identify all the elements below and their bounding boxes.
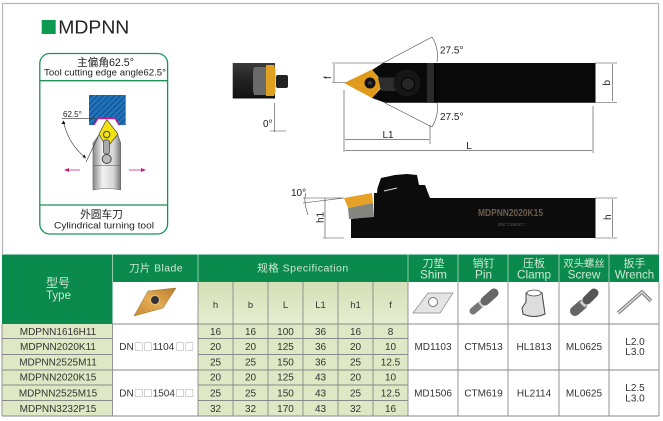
header labels: 型号 <box>46 276 70 290</box>
spec values: 25 <box>245 358 256 368</box>
dimension: 0 degrees: 0° <box>263 119 273 130</box>
spec values: 36 <box>315 342 326 353</box>
spare parts values <box>414 337 645 404</box>
icon: blade insert <box>134 288 176 316</box>
spec values: 125 <box>277 373 294 384</box>
header labels: 销钉 <box>472 256 494 270</box>
spare parts values: MD1506 <box>414 388 452 400</box>
blade codes: □□ <box>176 386 194 400</box>
spec values: 25 <box>210 388 221 400</box>
panel caption: 外圆车刀 <box>80 208 123 221</box>
end view of tool holder <box>233 63 288 98</box>
blade codes: □□ <box>134 386 153 400</box>
blade codes: 1504 <box>153 388 175 400</box>
diagram: workpiece and tool <box>62 95 146 190</box>
spec values: 20 <box>350 342 361 353</box>
type column: MDPNN2020K15 <box>20 373 97 384</box>
spec values: 10 <box>385 373 396 384</box>
spec values: 12.5 <box>381 358 401 368</box>
spec values: 20 <box>210 342 221 353</box>
table <box>2 254 659 416</box>
spare parts values: L2.0 <box>625 337 645 348</box>
side view of tool holder: DN□□1504□□ <box>498 222 526 227</box>
spec values: 25 <box>350 388 361 400</box>
header labels: 刀片 Blade <box>129 262 183 275</box>
icon: clamp <box>522 290 545 316</box>
spec header cells <box>198 282 408 324</box>
spec values: 150 <box>277 388 294 400</box>
labels: top view dimensions: L1 <box>382 130 394 141</box>
labels: side view dimensions <box>291 188 614 223</box>
panel: cutting angle diagram <box>40 54 168 234</box>
spare parts values: CTM513 <box>464 342 503 353</box>
spec values: 16 <box>350 327 361 338</box>
spec values: 32 <box>210 404 221 415</box>
spec column labels: h <box>213 300 218 311</box>
labels: top view dimensions: b <box>602 80 613 86</box>
type column: MDPNN2525M11 <box>19 358 97 368</box>
header labels: 扳手 <box>624 256 646 270</box>
labels: top view dimensions <box>323 46 613 152</box>
labels: top view dimensions: 27.5° <box>440 46 463 56</box>
header dividers <box>112 254 609 282</box>
spec values <box>210 327 401 415</box>
dimension: 0 degrees <box>263 103 286 132</box>
spec values: 125 <box>277 342 294 353</box>
labels: side view dimensions: h <box>603 214 614 220</box>
dimension: 62.5 degrees: 62.5° <box>63 110 82 119</box>
type column <box>19 327 98 415</box>
spare parts values: L3.0 <box>625 394 645 404</box>
dimension lines: side view <box>303 193 617 238</box>
header labels: Wrench <box>615 270 654 282</box>
blade codes: □□ <box>176 339 194 353</box>
spec values: 32 <box>245 404 256 415</box>
type column: MDPNN3232P15 <box>20 404 97 415</box>
spec values: 25 <box>245 388 256 400</box>
spec values: 36 <box>315 358 326 368</box>
header labels: 规格 Specification <box>257 262 349 275</box>
table header background <box>2 254 659 324</box>
spec values: 10 <box>385 342 396 353</box>
insert <box>344 70 384 98</box>
spec values: 150 <box>277 358 294 368</box>
type column: MDPNN2020K11 <box>20 342 96 353</box>
header labels <box>46 256 654 302</box>
side view of tool holder <box>344 174 596 238</box>
spec values: 20 <box>350 373 361 384</box>
spare parts values: CTM619 <box>464 388 503 400</box>
spec values: 43 <box>315 373 326 384</box>
spec values: 25 <box>350 358 361 368</box>
labels: side view dimensions: 10° <box>291 188 306 199</box>
spec values: 43 <box>315 404 326 415</box>
blade codes: □□ <box>134 339 153 353</box>
title: MDPNN: MDPNN <box>58 16 129 38</box>
spec values: 43 <box>315 388 326 400</box>
labels: top view dimensions: f <box>323 76 334 79</box>
spec values: 16 <box>385 404 396 415</box>
blade codes: DN <box>119 342 134 353</box>
labels: top view dimensions: L <box>466 141 472 152</box>
header labels: 刀垫 <box>422 256 444 270</box>
spec column labels <box>213 300 392 311</box>
spare parts values: L3.0 <box>625 347 645 358</box>
spare parts values: HL2114 <box>517 388 552 400</box>
header labels: 压板 <box>523 256 545 270</box>
arrows: feed direction <box>64 168 146 172</box>
spec values: 25 <box>210 358 221 368</box>
spare parts values: ML0625 <box>566 388 603 400</box>
type column: MDPNN1616H11 <box>20 327 97 338</box>
spare parts values: ML0625 <box>566 342 603 353</box>
dimension lines: top view <box>332 37 617 153</box>
clamp <box>378 78 396 91</box>
header labels: Shim <box>420 268 447 282</box>
blade codes: 1104 <box>153 342 175 353</box>
spec column labels: h1 <box>350 300 361 311</box>
spec values: 20 <box>210 373 221 384</box>
spec values: 16 <box>245 327 256 338</box>
blade codes: DN <box>119 388 134 400</box>
panel heading: 主偏角62.5° <box>77 55 134 69</box>
spare parts values: HL1813 <box>516 342 552 353</box>
page frame <box>2 4 658 254</box>
spec values: 36 <box>315 327 326 338</box>
spec values: 170 <box>277 404 294 415</box>
spare parts values: MD1103 <box>414 342 452 353</box>
spare parts values: L2.5 <box>625 383 645 394</box>
spec column labels: f <box>389 300 392 311</box>
spec values: 20 <box>245 342 256 353</box>
grid lines <box>2 282 659 416</box>
panel caption <box>54 208 154 230</box>
spec column labels: L1 <box>315 300 326 311</box>
spec values: 20 <box>245 373 256 384</box>
spec values: 8 <box>388 327 394 338</box>
type column: MDPNN2525M15 <box>19 388 98 400</box>
table row shading <box>2 324 408 416</box>
side view of tool holder: MDPNN2020K15 <box>478 208 543 219</box>
panel caption: Cylindrical turning tool <box>54 220 154 230</box>
header labels: Screw <box>568 268 601 282</box>
icon: pin <box>473 293 494 311</box>
spec column labels: L <box>283 300 288 311</box>
spec values: 12.5 <box>381 388 401 400</box>
icon: screw <box>575 293 594 311</box>
panel heading <box>44 55 166 78</box>
top view of tool holder <box>344 63 596 103</box>
spec values: 32 <box>350 404 361 415</box>
header labels: Type <box>46 290 71 302</box>
icon: wrench <box>618 292 651 313</box>
header labels: 双头螺丝 <box>563 258 605 270</box>
labels: top view dimensions: 27.5° <box>440 112 463 123</box>
spec values: 16 <box>210 327 221 338</box>
header labels: Clamp <box>517 268 551 282</box>
header labels: Pin <box>475 268 492 282</box>
spec column labels: b <box>248 300 253 311</box>
spec values: 100 <box>277 327 294 338</box>
labels: side view dimensions: h1 <box>316 211 326 223</box>
blade codes <box>119 339 194 400</box>
panel heading: Tool cutting edge angle62.5° <box>44 68 166 78</box>
icon: shim <box>413 293 453 313</box>
